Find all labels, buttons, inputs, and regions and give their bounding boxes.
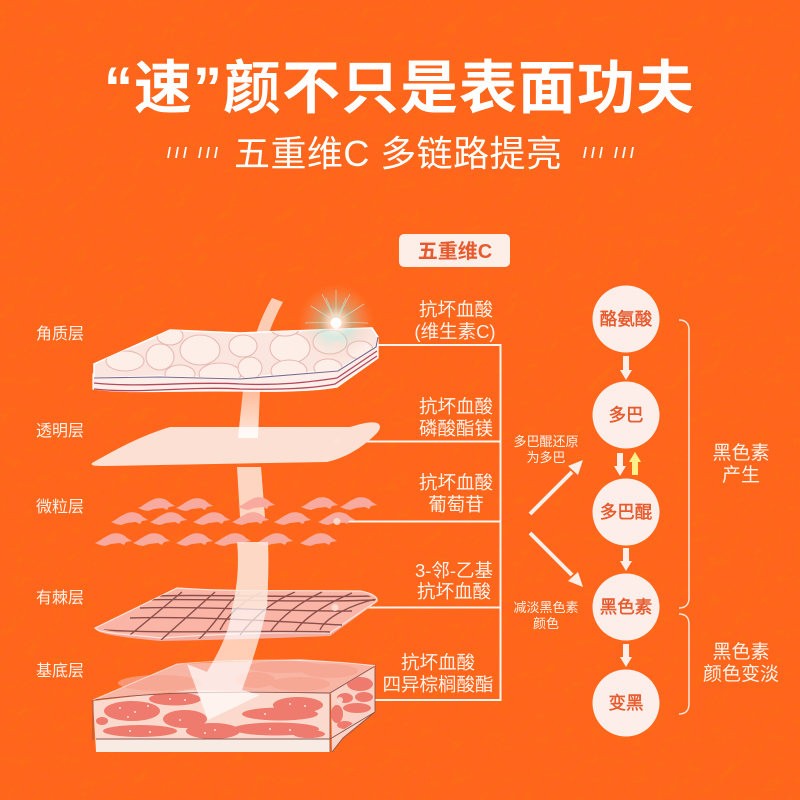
layer labels: [36, 325, 84, 680]
pathway circle: tyrosine: [592, 286, 660, 352]
light arrow: segment through lucidum: [238, 390, 260, 438]
layer: stratum lucidum: [92, 422, 380, 466]
diagonal arrow: reduces dopaquinone: [530, 460, 583, 514]
bracket labels: 黑色素: [712, 641, 770, 663]
layer: stratum spinosum: [95, 588, 377, 641]
vitamin C form names: 抗坏血酸: [419, 299, 493, 320]
bracket labels: 产生: [722, 464, 760, 486]
connector dots: [332, 342, 343, 703]
pathway arrows: [614, 356, 632, 667]
side notes: 减淡黑色素: [513, 600, 579, 615]
light arrow: head pointing to basal layer: [187, 607, 267, 720]
layer: stratum corneum: [93, 322, 378, 392]
bracket: melanin production: [679, 320, 689, 608]
vitamin C form names: 抗坏血酸: [419, 472, 493, 493]
pathway circle: dopaquinone: [592, 478, 660, 546]
vitamin C form names: (维生素C): [414, 321, 496, 342]
side notes: 为多巴: [526, 450, 566, 465]
pathway circle: dopaquinone: 多巴醌: [600, 502, 652, 522]
pathway circle: tyrosine: 酪氨酸: [600, 309, 652, 329]
title: “速”颜不只是表面功夫: [104, 56, 694, 121]
bracket: melanin lightening: [679, 614, 689, 714]
vitamin C form names: 葡萄苷: [428, 494, 484, 515]
layer labels: 透明层: [36, 422, 84, 440]
pathway circle: darkening: 变黑: [608, 693, 644, 713]
vitamin C form names: 抗坏血酸: [417, 581, 491, 602]
diagonal arrow: lightens melanin: [530, 533, 583, 587]
badge: five-fold vitamin C: [399, 234, 510, 267]
layer labels: 微粒层: [36, 498, 84, 516]
layer: stratum granulosum particles: [95, 497, 377, 546]
layer: stratum basale block: [93, 659, 375, 752]
connector lines: [337, 344, 500, 701]
pathway circle: melanin: [592, 574, 660, 640]
layer labels: 基底层: [36, 662, 84, 680]
pathway circle: dopa: [592, 382, 660, 448]
pathway circle: melanin: 黑色素: [600, 597, 652, 617]
vitamin C form names: 3-邻-乙基: [415, 560, 493, 581]
subtitle with tick decorations: 五重维C 多链路提亮: [234, 133, 562, 174]
badge: five-fold vitamin C: 五重维C: [418, 240, 492, 263]
light arrow: segment above spinosum: [232, 542, 268, 608]
vitamin C form names: 四异棕榈酸酯: [382, 674, 494, 695]
vitamin C form names: 抗坏血酸: [419, 396, 493, 417]
bracket labels: 颜色变淡: [703, 663, 779, 685]
bracket labels: [703, 442, 779, 685]
pathway circle: darkening: [592, 670, 660, 736]
yellow reverse arrow: [629, 452, 641, 475]
layer labels: 角质层: [36, 325, 84, 343]
side notes: 多巴醌还原: [513, 434, 579, 449]
bracket labels: 黑色素: [712, 442, 770, 464]
side notes: 颜色: [533, 616, 559, 631]
sparkle on stratum corneum: [298, 284, 374, 360]
vitamin C form names: 磷酸酯镁: [419, 418, 493, 439]
side notes: [513, 434, 579, 631]
vitamin C form names: 抗坏血酸: [401, 652, 475, 673]
light arrow: upper segment: [251, 298, 283, 357]
light arrow: segment below lucidum: [237, 467, 265, 517]
pathway circle: dopa: 多巴: [608, 405, 644, 425]
layer labels: 有棘层: [36, 589, 84, 607]
vitamin C form names: [382, 299, 496, 695]
